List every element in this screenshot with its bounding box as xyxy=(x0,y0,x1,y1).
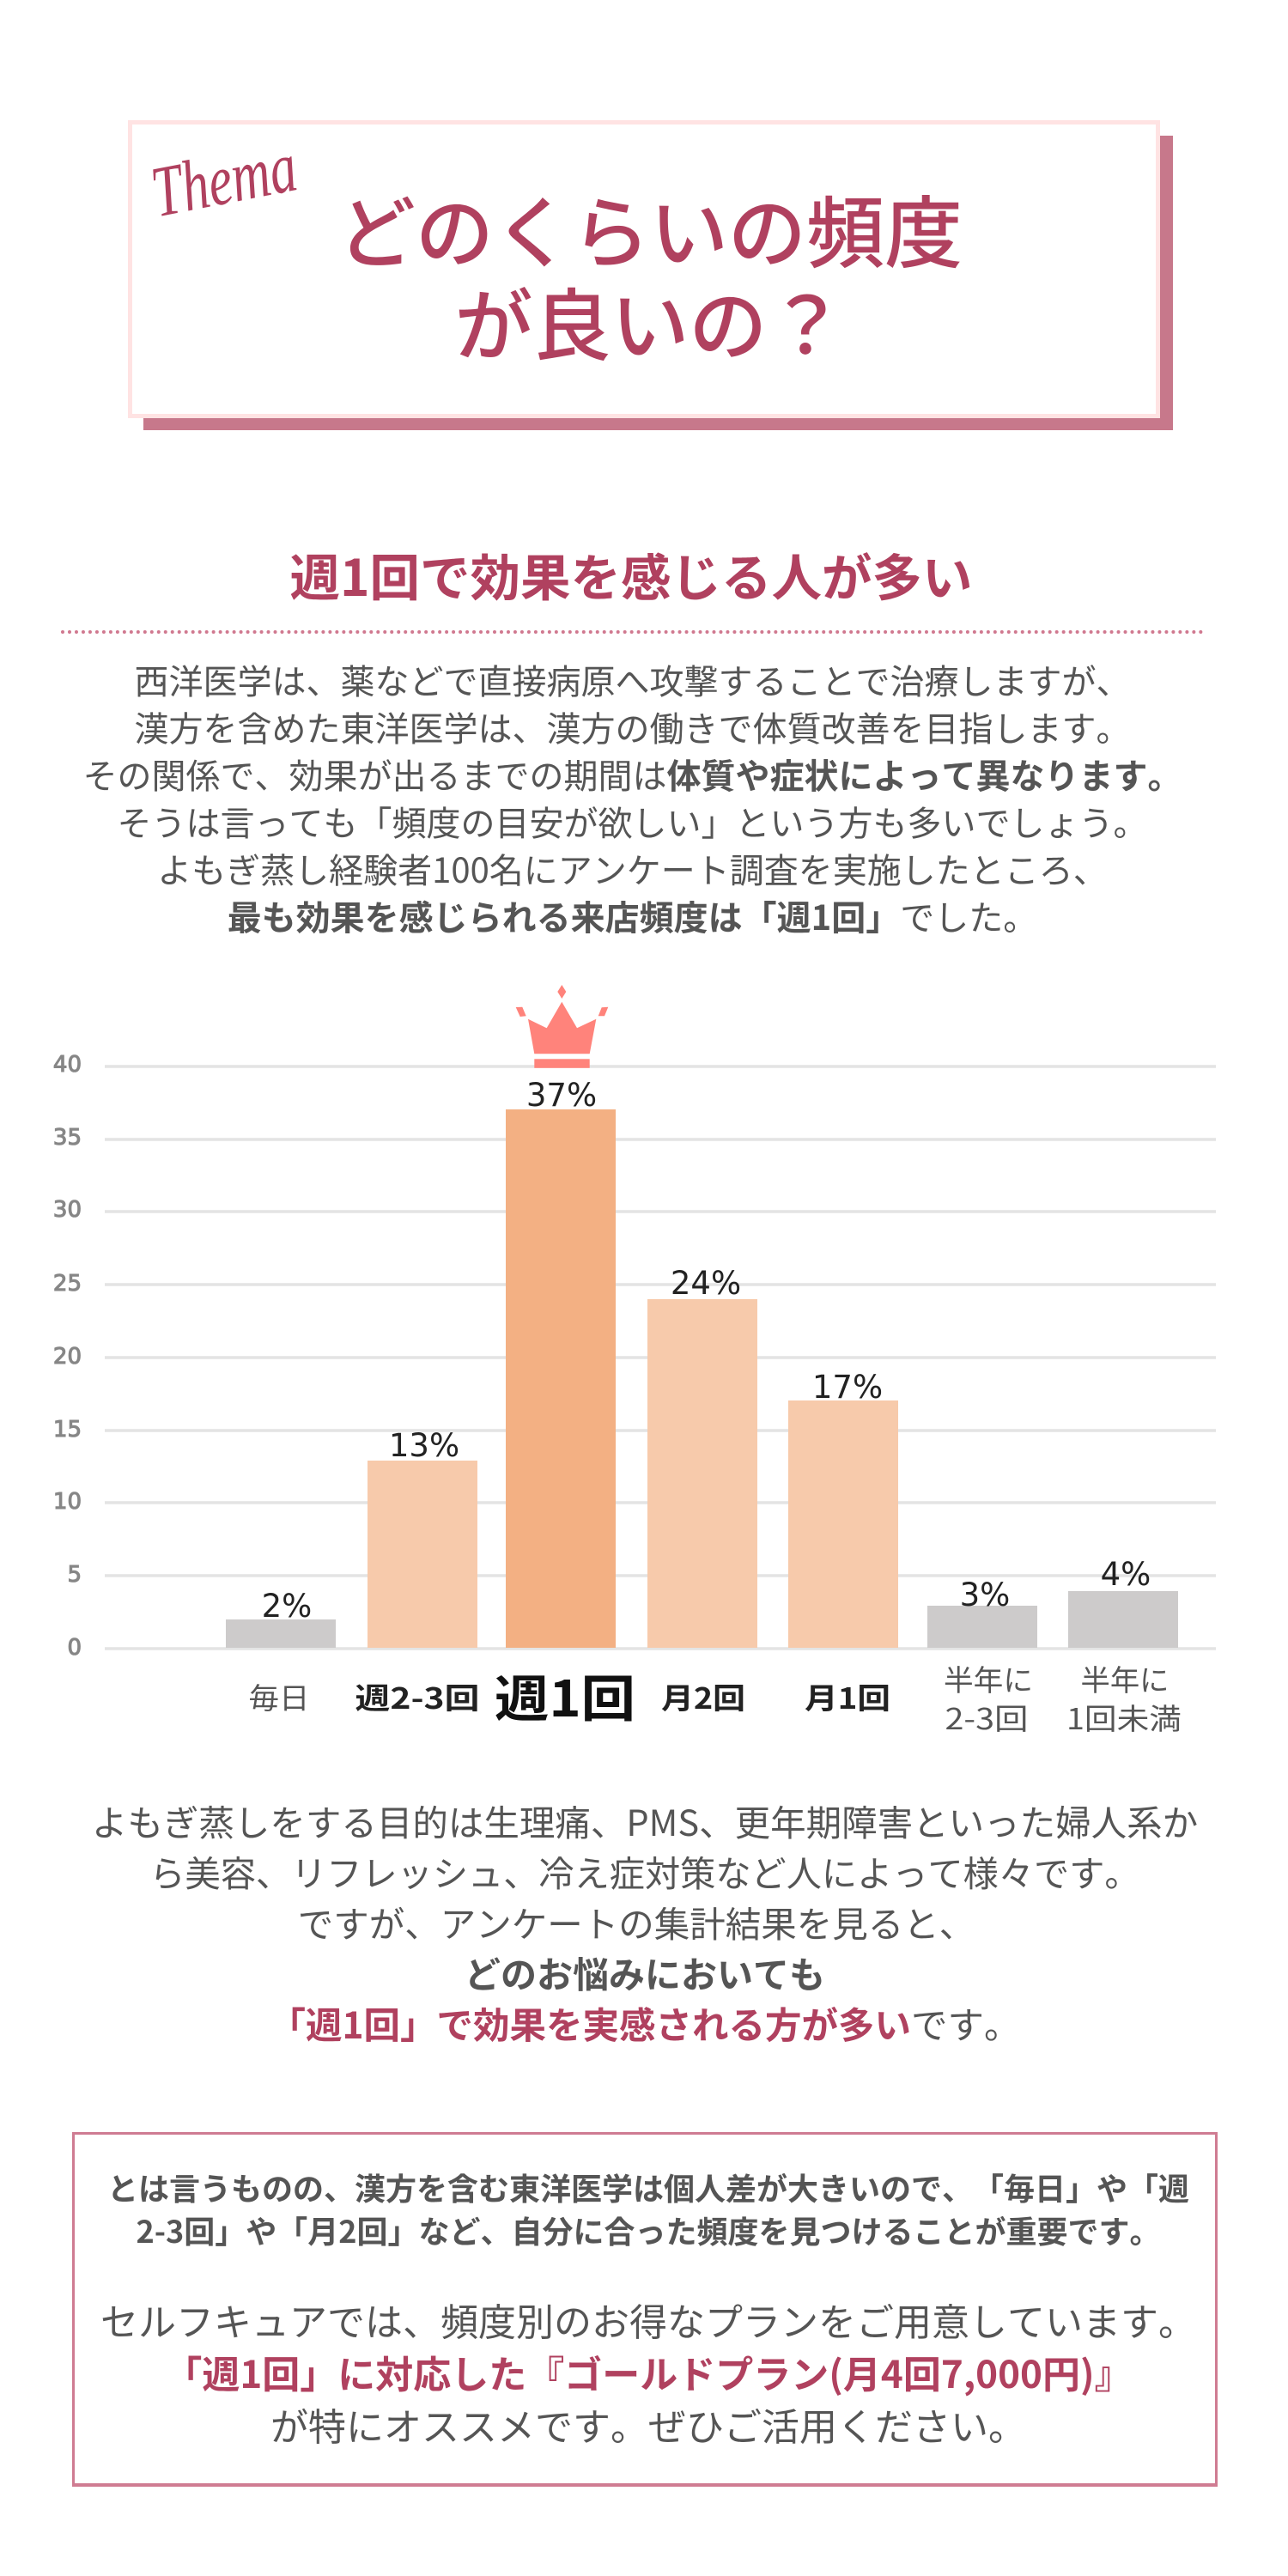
y axis labels xyxy=(53,1052,82,1661)
category labels: 毎日 xyxy=(249,1675,309,1717)
text block: intro: その関係で、効果が出るまでの期間は体質や症状によって異なります。 xyxy=(82,749,1182,799)
text block: intro: そうは言っても「頻度の目安が欲しい」という方も多いでしょう。 xyxy=(117,796,1147,846)
note text xyxy=(107,2165,1189,2252)
note text: とは言うものの、漢方を含む東洋医学は個人差が大きいので、「毎日」や「週 xyxy=(107,2165,1189,2209)
heading: 週1回で効果を感じる人が多い xyxy=(289,538,973,611)
plan recommendation text xyxy=(100,2292,1196,2451)
text block: intro xyxy=(82,654,1182,940)
label: Thema: Thema xyxy=(145,127,303,233)
text block: purpose xyxy=(92,1795,1198,2050)
y axis labels: 5 xyxy=(67,1562,82,1588)
note text: 2-3回」や「月2回」など、自分に合った頻度を見つけることが重要です。 xyxy=(136,2208,1161,2252)
card drop shadow xyxy=(143,136,1173,430)
y axis labels: 10 xyxy=(53,1489,82,1515)
panel: title card xyxy=(128,120,1173,430)
title: が良いの？ xyxy=(454,264,845,377)
bar chart xyxy=(53,985,1216,1738)
value labels: 4% xyxy=(1101,1556,1151,1593)
y axis labels: 15 xyxy=(53,1417,82,1443)
value labels: 13% xyxy=(389,1427,459,1464)
value labels: 37% xyxy=(526,1077,597,1114)
title: どのくらいの頻度 xyxy=(337,171,963,284)
y axis labels: 30 xyxy=(53,1197,82,1223)
y axis labels: 25 xyxy=(53,1271,82,1297)
text block: intro: よもぎ蒸し経験者100名にアンケート調査を実施したところ、 xyxy=(157,843,1108,893)
text block: intro: 最も効果を感じられる来店頻度は「週1回」でした。 xyxy=(228,890,1037,940)
y axis labels: 20 xyxy=(53,1344,82,1370)
text block: purpose: ら美容、リフレッシュ、冷え症対策など人によって様々です。 xyxy=(149,1845,1140,1897)
text block: purpose: 「週1回」で効果を実感される方が多いです。 xyxy=(269,1997,1021,2050)
plan recommendation text: セルフキュアでは、頻度別のお得なプランをご用意しています。 xyxy=(100,2292,1196,2347)
category labels: 半年に xyxy=(1080,1657,1170,1699)
category labels: 週1回 xyxy=(495,1659,635,1731)
title xyxy=(337,171,963,377)
text block: intro: 漢方を含めた東洋医学は、漢方の働きで体質改善を目指します。 xyxy=(134,702,1130,751)
category labels: 週2-3回 xyxy=(355,1675,479,1717)
plan recommendation text: 「週1回」に対応した『ゴールドプラン(月4回7,000円)』 xyxy=(164,2344,1133,2399)
text block: purpose: どのお悩みにおいても xyxy=(465,1947,825,1999)
category labels: 半年に xyxy=(944,1657,1033,1699)
plan recommendation text: が特にオススメです。ぜひご活用ください。 xyxy=(270,2397,1026,2451)
panel: recommendation box xyxy=(72,2132,1218,2487)
text block: intro: 西洋医学は、薬などで直接病原へ攻撃することで治療しますが、 xyxy=(134,654,1130,704)
y axis labels: 40 xyxy=(53,1052,82,1078)
category labels: 月1回 xyxy=(805,1675,890,1717)
category labels xyxy=(249,1657,1182,1738)
y axis labels: 0 xyxy=(67,1635,82,1661)
bars xyxy=(226,1109,1178,1648)
value labels: 3% xyxy=(960,1577,1010,1613)
value labels xyxy=(262,1077,1151,1625)
value labels: 2% xyxy=(262,1588,312,1625)
category labels: 月2回 xyxy=(661,1675,745,1717)
category labels: 2-3回 xyxy=(945,1696,1029,1738)
value labels: 17% xyxy=(812,1369,883,1406)
text block: purpose: よもぎ蒸しをする目的は生理痛、PMS、更年期障害といった婦人系か xyxy=(92,1795,1198,1846)
card frame xyxy=(128,120,1160,418)
y axis labels: 35 xyxy=(53,1125,82,1151)
icon: crown xyxy=(516,985,608,1068)
dotted divider xyxy=(61,630,1204,634)
category labels: 1回未満 xyxy=(1066,1696,1182,1738)
text block: purpose: ですが、アンケートの集計結果を見ると、 xyxy=(298,1896,975,1947)
value labels: 24% xyxy=(671,1265,741,1302)
